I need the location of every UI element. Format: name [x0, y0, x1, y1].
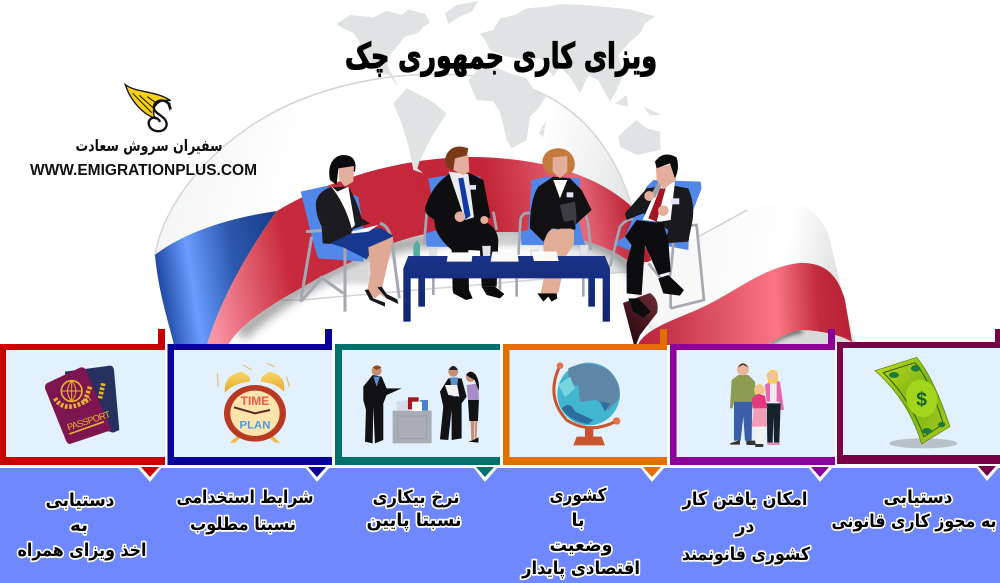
text block: employment conditions: شرایط استخدامی — [176, 487, 314, 508]
grey under-chair shade — [318, 232, 665, 335]
text block: stable economy: اقتصادی پایدار — [521, 558, 640, 579]
glasses — [429, 245, 588, 261]
text block: passport: به — [70, 515, 88, 536]
text block: finding a job: در — [735, 516, 754, 537]
text block: stable economy — [521, 485, 640, 579]
text block: stable economy: با — [572, 510, 584, 531]
man with microphone — [610, 155, 704, 317]
icon: family — [730, 363, 784, 447]
logo persian name: سفیران سروش سعادت — [76, 136, 222, 155]
text block: finding a job — [682, 489, 810, 565]
text block: passport: اخذ ویزای همراه — [18, 540, 146, 561]
text block: finding a job: کشوری قانونمند — [682, 544, 810, 565]
red ribbon right — [638, 263, 852, 345]
logo — [30, 85, 257, 179]
text block: employment conditions: نسبتا مطلوب — [190, 514, 296, 535]
blue ribbon segment — [155, 211, 277, 345]
panel discussion scene — [301, 147, 704, 322]
woman on left chair — [301, 155, 399, 312]
icon: passports — [45, 366, 119, 444]
panel: office meeting — [335, 344, 500, 482]
south america — [393, 88, 447, 173]
text block: unemployment rate: نسبتا پایین — [366, 510, 462, 531]
dark ribbon shadow on right — [768, 331, 802, 344]
panel: passport — [0, 329, 165, 482]
icon: passports: PASSPORT — [66, 409, 112, 433]
text block: passport — [18, 490, 146, 561]
logo website: WWW.EMIGRATIONPLUS.COM — [30, 162, 257, 179]
panel: globe — [503, 329, 667, 482]
name cards — [447, 252, 559, 262]
text block: unemployment rate — [366, 487, 462, 531]
text block: employment conditions — [176, 487, 314, 535]
icon: banknote: $ — [916, 389, 927, 410]
dark ribbon fold — [623, 293, 658, 345]
world map — [337, 1, 662, 173]
north america — [337, 9, 430, 87]
text block: unemployment rate: نرخ بیکاری — [372, 487, 460, 508]
text block: legal work permit: دستیابی — [884, 487, 952, 508]
table — [403, 252, 610, 322]
africa — [468, 68, 547, 148]
southeast asia islands — [615, 95, 662, 115]
grey edge of right ribbon — [698, 210, 747, 237]
text block: stable economy: وضعیت — [550, 535, 612, 556]
woman with orange hair — [517, 148, 592, 302]
water bottle — [413, 240, 420, 261]
greenland — [445, 1, 478, 24]
logo emblem: winged swan — [125, 85, 171, 131]
madagascar — [539, 120, 546, 137]
white ribbon band left — [155, 74, 650, 300]
red ribbon segment — [207, 157, 652, 345]
australia — [618, 120, 661, 155]
text block: finding a job: امکان یافتن کار — [682, 489, 808, 510]
white ribbon band right — [632, 203, 855, 345]
info band — [0, 468, 1000, 583]
panel: family — [670, 329, 835, 482]
icon: business people — [363, 365, 479, 443]
man with blue tie — [424, 147, 504, 300]
eurasia — [480, 4, 655, 102]
text block: passport: دستیابی — [46, 490, 114, 511]
icon: clock: PLAN — [240, 419, 270, 431]
title: ویزای کاری جمهوری چک — [345, 37, 657, 77]
text block: stable economy: کشوری — [550, 485, 607, 506]
icon: banknote — [875, 357, 957, 448]
icon: clock — [217, 363, 289, 443]
grey underside of right ribbon — [767, 328, 858, 346]
icon: globe — [554, 362, 620, 445]
panel: alarm clock — [168, 329, 332, 482]
panel: banknote — [837, 329, 1000, 481]
text block: legal work permit — [832, 487, 996, 532]
background: flag ribbon — [155, 74, 858, 346]
ribbon floor shadow — [240, 235, 650, 335]
icon: clock: TIME — [241, 394, 269, 408]
